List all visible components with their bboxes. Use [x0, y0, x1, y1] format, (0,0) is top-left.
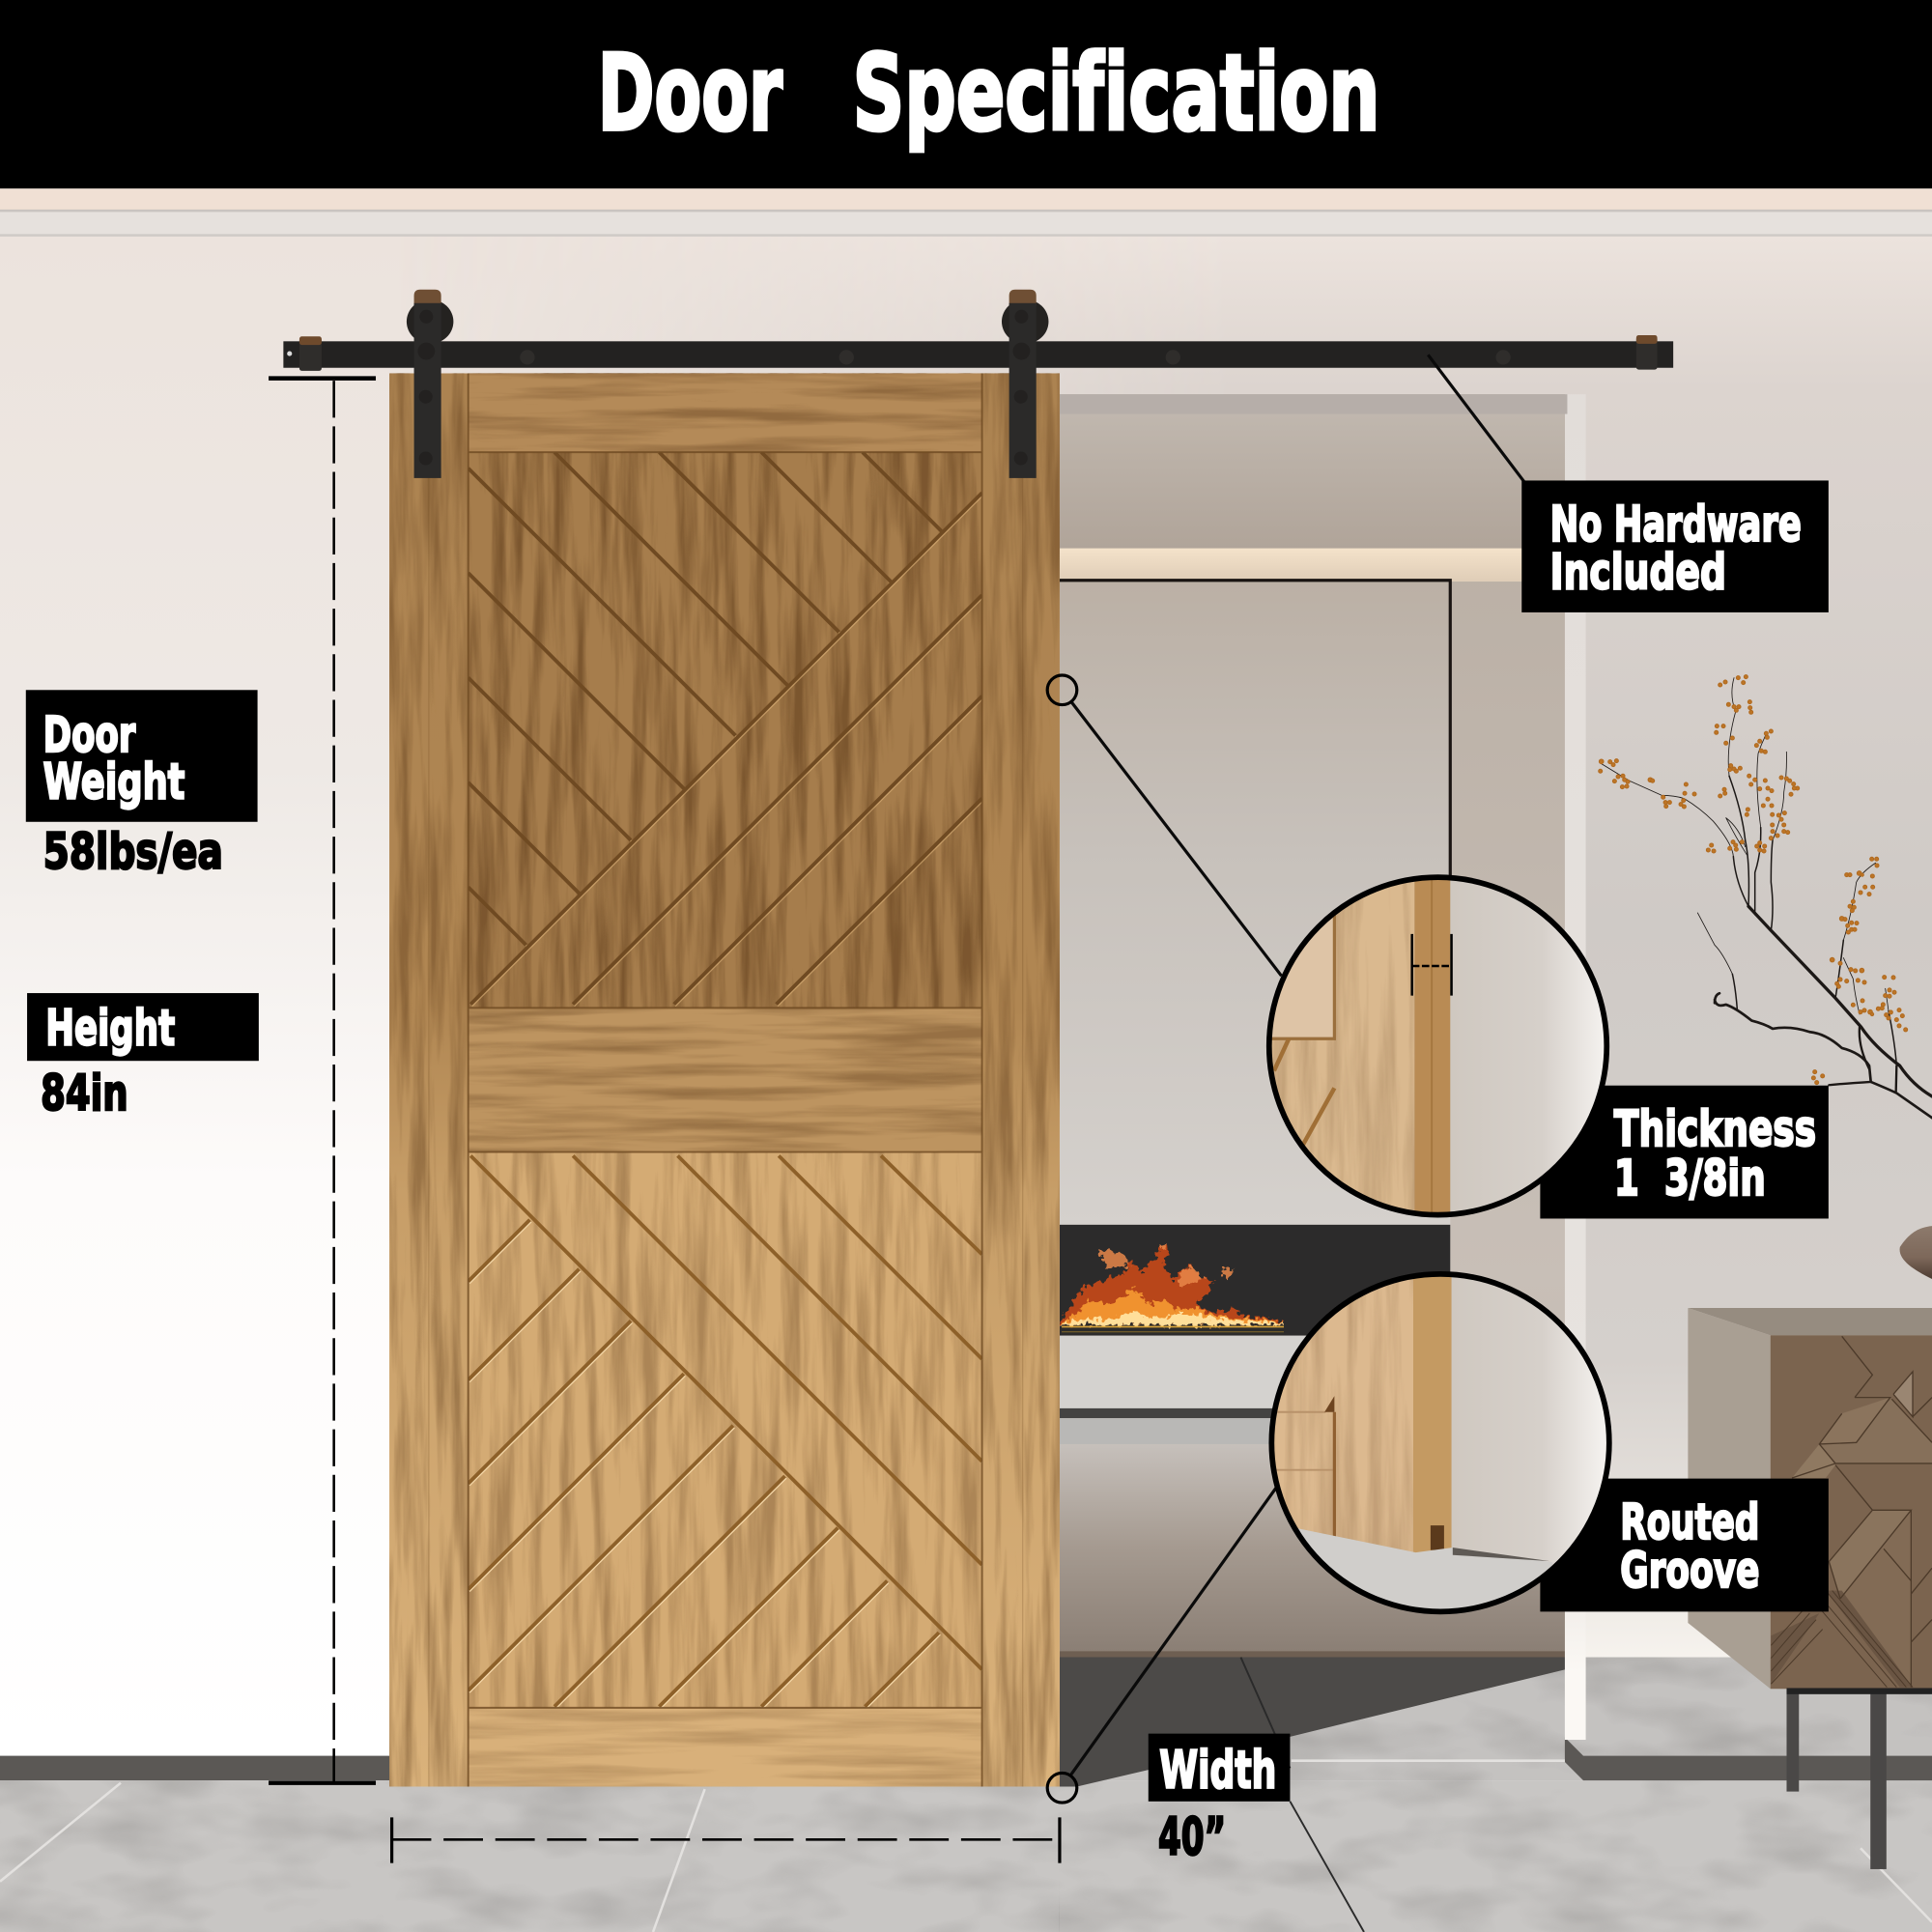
detail circle: routed groove: [1270, 1273, 1609, 1611]
callout marker: bottom: [1047, 1773, 1077, 1803]
left baseboard: [0, 1756, 394, 1780]
label: door weight: Door: [43, 707, 136, 764]
value: width: 40”: [1158, 1806, 1226, 1867]
black light-strip line: [1060, 581, 1450, 877]
lower panel: [469, 1152, 983, 1708]
text: routed groove: Routed: [1620, 1494, 1759, 1551]
right baseboard: [1565, 1737, 1932, 1780]
right hanger: [1002, 290, 1048, 478]
label: no hardware included: Included: [1550, 545, 1726, 602]
cornice band: [0, 188, 1932, 211]
callout lines: [1069, 355, 1524, 1776]
right wall: [841, 311, 1932, 1658]
cabinet legs: [1786, 1688, 1932, 1869]
floor joints: [1240, 1658, 1364, 1932]
title bar: [0, 0, 1932, 188]
width dimension: [392, 1817, 1060, 1863]
left wall: [0, 237, 1932, 1756]
doorway interior: [1060, 394, 1565, 1658]
label: width: Width: [1159, 1740, 1276, 1801]
upper panel: [469, 452, 983, 1008]
title text: Door: [598, 32, 782, 155]
label tab: thickness: [1540, 1086, 1829, 1218]
dark floor with shadow: [1060, 1658, 1565, 1786]
stiles and rails: [389, 373, 1060, 1786]
callout marker: top: [1047, 675, 1077, 705]
text: thickness: 1 3/8in: [1614, 1151, 1766, 1208]
door: [389, 373, 1060, 1786]
label: door weight: Weight: [43, 754, 185, 811]
vase: [1900, 1226, 1932, 1279]
fireplace flames: [1062, 1243, 1284, 1332]
text: routed groove: Groove: [1620, 1543, 1759, 1600]
text: thickness: [1614, 1101, 1816, 1208]
top rail: [469, 373, 982, 452]
label: height: [27, 993, 259, 1061]
text: routed groove: [1620, 1494, 1759, 1600]
stoppers: [299, 337, 322, 371]
label: height: Height: [45, 1001, 175, 1058]
middle rail: [469, 1008, 982, 1152]
height dimension: [269, 379, 376, 1783]
label: width: [1149, 1734, 1290, 1802]
text: thickness: Thickness: [1614, 1101, 1816, 1158]
value: height: 84in: [41, 1065, 128, 1122]
detail circle: thickness: [1269, 877, 1608, 1216]
left hanger: [407, 290, 453, 478]
branch with berries: [1599, 675, 1932, 1119]
title bar: Specification: [853, 32, 1380, 155]
label: door weight: [26, 690, 258, 822]
value: door weight: 58lbs/ea: [43, 824, 223, 881]
cabinet: [1688, 1308, 1932, 1689]
label: no hardware included: [1521, 480, 1829, 612]
label tab: routed groove: [1540, 1479, 1829, 1611]
thickness marker: [1412, 934, 1452, 996]
track rail: [283, 335, 1673, 371]
bottom rail: [469, 1708, 982, 1786]
label: no hardware included: No Hardware: [1550, 497, 1802, 554]
floor: [0, 1780, 1932, 1932]
